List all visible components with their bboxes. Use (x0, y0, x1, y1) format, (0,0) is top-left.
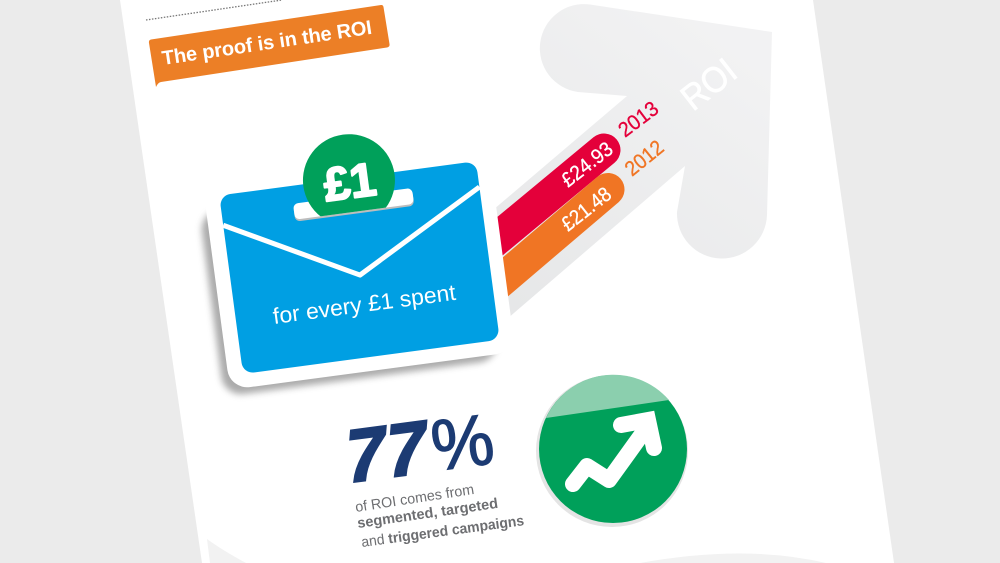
stat description: and triggered campaigns (360, 513, 525, 551)
dotted divider (146, 0, 282, 20)
value 2012: £21.48 (557, 183, 616, 236)
stat 77%: 77 (343, 404, 431, 499)
heading text: The proof is in the ROI (160, 17, 373, 70)
coin (302, 134, 395, 216)
infographic canvas (120, 0, 894, 563)
stat description: segmented, targeted (356, 496, 499, 532)
envelope caption: for every £1 spent (271, 280, 458, 329)
label 2013: 2013 (614, 97, 663, 142)
label 2012: 2012 (621, 136, 669, 181)
icon trend arrow (573, 420, 654, 484)
stat description: of ROI comes from (354, 482, 475, 516)
bar: 2013 (470, 137, 618, 261)
bottom curved shapes (207, 539, 826, 563)
envelope body (219, 161, 500, 374)
page sheet (120, 0, 894, 563)
ROI arrow (480, 4, 772, 325)
stat 77%: % (427, 399, 499, 487)
envelope (192, 116, 516, 397)
stat 77% (343, 399, 499, 499)
coin value: £1 (320, 152, 379, 211)
arrow label: ROI (673, 50, 744, 118)
envelope flap line (223, 187, 489, 292)
stat description (354, 482, 525, 551)
heading banner (149, 5, 390, 87)
icon highlight band (546, 375, 669, 418)
growth icon (536, 375, 688, 527)
bar: 2012 (470, 183, 616, 307)
value 2013: £24.93 (557, 137, 618, 192)
coin slot (293, 188, 414, 222)
